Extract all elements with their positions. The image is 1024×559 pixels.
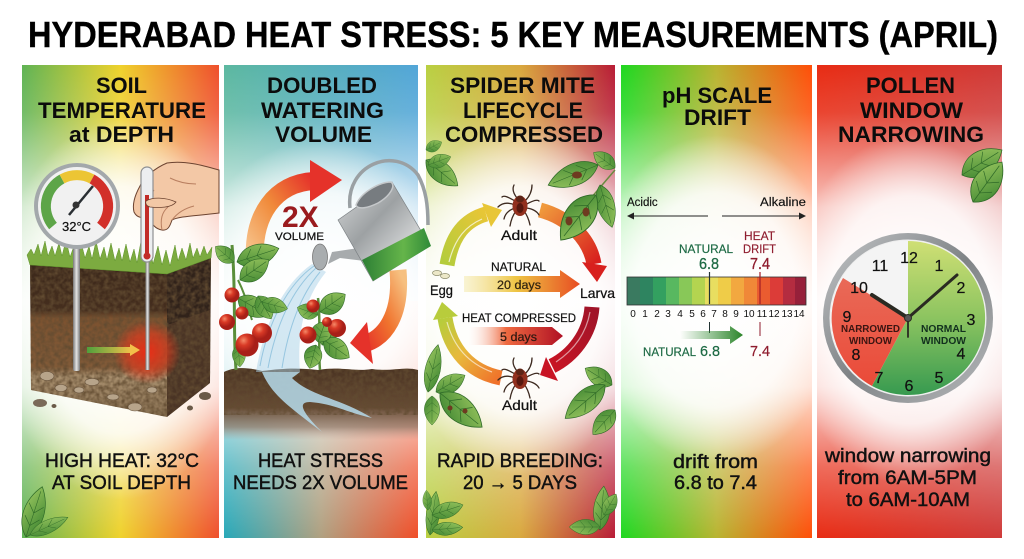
watering can — [312, 161, 431, 281]
heading: DOUBLED — [267, 73, 377, 98]
pH scale numbers: 8 — [722, 309, 728, 320]
clock numerals: 6 — [905, 378, 914, 395]
gauge: 32°C — [62, 219, 91, 234]
window labels: NORMAL — [921, 324, 966, 335]
lifecycle labels: Adult — [502, 397, 537, 413]
drift arrow and values: NATURAL — [643, 345, 696, 359]
pH scale numbers: 6 — [700, 309, 706, 320]
natural and heat drift labels: 6.8 — [699, 256, 719, 273]
natural and heat drift labels: DRIFT — [743, 242, 777, 256]
caption: NEEDS 2X VOLUME — [233, 473, 408, 494]
panel: soil temperature at depth — [21, 65, 220, 538]
normal window wedge — [872, 241, 985, 395]
natural 20 days arrow: 20 days — [497, 280, 541, 292]
heading: soil temperature — [38, 73, 206, 147]
caption: drift from — [673, 452, 758, 473]
acidic alkaline axis: Alkaline — [760, 197, 806, 209]
heat compressed 5 days arrow: 5 days — [500, 332, 537, 344]
caption — [824, 446, 991, 511]
pH scale numbers: 14 — [793, 309, 805, 320]
caption: AT SOIL DEPTH — [52, 473, 191, 494]
pH scale numbers: 13 — [781, 309, 793, 320]
icon: hand holding thermometer — [133, 162, 219, 230]
caption: 6.8 to 7.4 — [674, 473, 757, 494]
panel: doubled watering volume — [215, 65, 431, 538]
grass — [27, 240, 212, 274]
pH scale numbers: 2 — [654, 309, 660, 320]
heading: NARROWING — [838, 122, 984, 147]
panel: spider mite lifecycle — [422, 65, 618, 538]
clock numerals: 10 — [850, 280, 868, 297]
cycle arrow: adult to egg — [433, 302, 501, 378]
soil block — [30, 255, 211, 417]
clock numerals — [843, 250, 976, 395]
natural and heat drift labels: HEAT — [744, 229, 776, 243]
acidic alkaline axis: Acidic — [627, 197, 658, 209]
clock numerals: 7 — [875, 370, 884, 387]
drift arrow and values: 7.4 — [750, 343, 770, 360]
heading: WATERING — [261, 98, 384, 123]
caption — [233, 451, 408, 494]
heat compressed 5 days arrow: HEAT COMPRESSED — [462, 313, 576, 325]
natural 20 days arrow — [464, 262, 580, 298]
caption — [45, 451, 199, 494]
clock numerals: 8 — [852, 347, 861, 364]
pH scale numbers: 12 — [768, 309, 780, 320]
heading: SPIDER MITE — [450, 73, 595, 98]
natural and heat drift labels — [679, 229, 777, 273]
heading — [445, 73, 603, 147]
pH scale numbers: 9 — [733, 309, 739, 320]
pH colour bar — [627, 272, 806, 305]
thumb over thermometer — [146, 198, 176, 207]
panel: pH scale drift — [621, 65, 812, 538]
heading — [662, 83, 772, 130]
water stream — [256, 264, 372, 432]
heading: VOLUME — [275, 122, 372, 147]
window labels: NARROWED — [841, 324, 900, 335]
heading: soil temperature: SOIL — [96, 73, 147, 98]
caption: HEAT STRESS — [258, 451, 383, 472]
icon: eggs — [432, 270, 450, 278]
clock numerals: 9 — [843, 309, 852, 326]
pH scale numbers: 1 — [642, 309, 648, 320]
2X volume label: 2X — [282, 201, 319, 234]
caption: RAPID BREEDING: — [437, 451, 603, 472]
heading: COMPRESSED — [445, 122, 603, 147]
caption: HIGH HEAT: 32°C — [45, 451, 199, 472]
pH scale numbers: 3 — [665, 309, 671, 320]
clock numerals: 3 — [967, 312, 976, 329]
drift arrow and values — [643, 322, 770, 360]
heading — [261, 73, 384, 147]
lifecycle labels: Larva — [580, 285, 615, 301]
clock numerals: 4 — [957, 346, 966, 363]
thermometer — [141, 167, 153, 370]
heading — [838, 73, 984, 147]
leaves lower — [421, 343, 622, 537]
heading: WINDOW — [860, 98, 964, 123]
2X volume label — [275, 201, 324, 243]
icon: mite top — [498, 185, 539, 226]
icon: mite bottom — [498, 358, 539, 399]
heading: DRIFT — [684, 105, 751, 130]
pH scale numbers: 10 — [743, 309, 755, 320]
natural and heat drift labels: 7.4 — [750, 256, 770, 273]
window labels: WINDOW — [849, 336, 893, 347]
heat compressed 5 days arrow — [462, 313, 576, 345]
curved arrow down — [350, 270, 399, 364]
cycle arrow: adult to larva — [540, 210, 607, 282]
heading: LIFECYCLE — [463, 98, 583, 123]
clock numerals: 11 — [872, 258, 888, 275]
heading: soil temperature: at DEPTH — [69, 122, 174, 147]
pH scale numbers — [630, 309, 805, 320]
cycle arrow: larva to adult — [540, 307, 592, 381]
heading: pH SCALE — [662, 83, 772, 108]
pH scale numbers: 5 — [689, 309, 695, 320]
lifecycle labels: Adult — [501, 227, 537, 243]
clock numerals: 1 — [935, 258, 944, 275]
soil — [224, 368, 418, 440]
2X volume label: VOLUME — [275, 231, 324, 243]
tomato plant left — [211, 238, 320, 370]
natural 20 days arrow: NATURAL — [491, 262, 547, 274]
clock — [823, 233, 993, 403]
window labels — [841, 324, 967, 347]
pH scale numbers: 0 — [630, 309, 636, 320]
tomato plant right — [295, 286, 355, 371]
caption: to 6AM-10AM — [846, 490, 970, 511]
panel: pollen window narrowing — [817, 65, 1004, 538]
natural and heat drift labels: NATURAL — [679, 242, 733, 256]
caption — [437, 451, 603, 494]
pH scale numbers: 4 — [677, 309, 683, 320]
clock hands — [872, 275, 957, 337]
caption: from 6AM-5PM — [838, 468, 977, 489]
lifecycle labels — [430, 227, 615, 413]
lifecycle labels: Egg — [430, 282, 453, 298]
caption — [673, 452, 758, 494]
pH scale numbers: 11 — [757, 309, 768, 320]
clock numerals: 2 — [957, 280, 966, 297]
curved arrow up — [255, 160, 342, 262]
pH scale numbers: 7 — [711, 309, 717, 320]
heading: POLLEN — [866, 73, 955, 98]
narrowed window wedge — [832, 278, 908, 386]
gauge — [36, 165, 118, 371]
cycle arrow: egg to adult — [447, 203, 502, 265]
leaf decoration — [16, 484, 71, 541]
arrow: green to yellow — [87, 344, 140, 356]
drift arrow and values: 6.8 — [700, 343, 720, 360]
clock numerals: 5 — [935, 370, 944, 387]
heading: soil temperature: TEMPERATURE — [38, 98, 206, 123]
acidic alkaline axis — [627, 197, 806, 220]
window labels: WINDOW — [921, 336, 967, 347]
caption: window narrowing — [824, 446, 991, 467]
caption: 20 → 5 DAYS — [463, 473, 577, 494]
clock numerals: 12 — [900, 250, 918, 267]
leaves — [956, 140, 1013, 210]
upper right and left leaves — [420, 137, 620, 249]
